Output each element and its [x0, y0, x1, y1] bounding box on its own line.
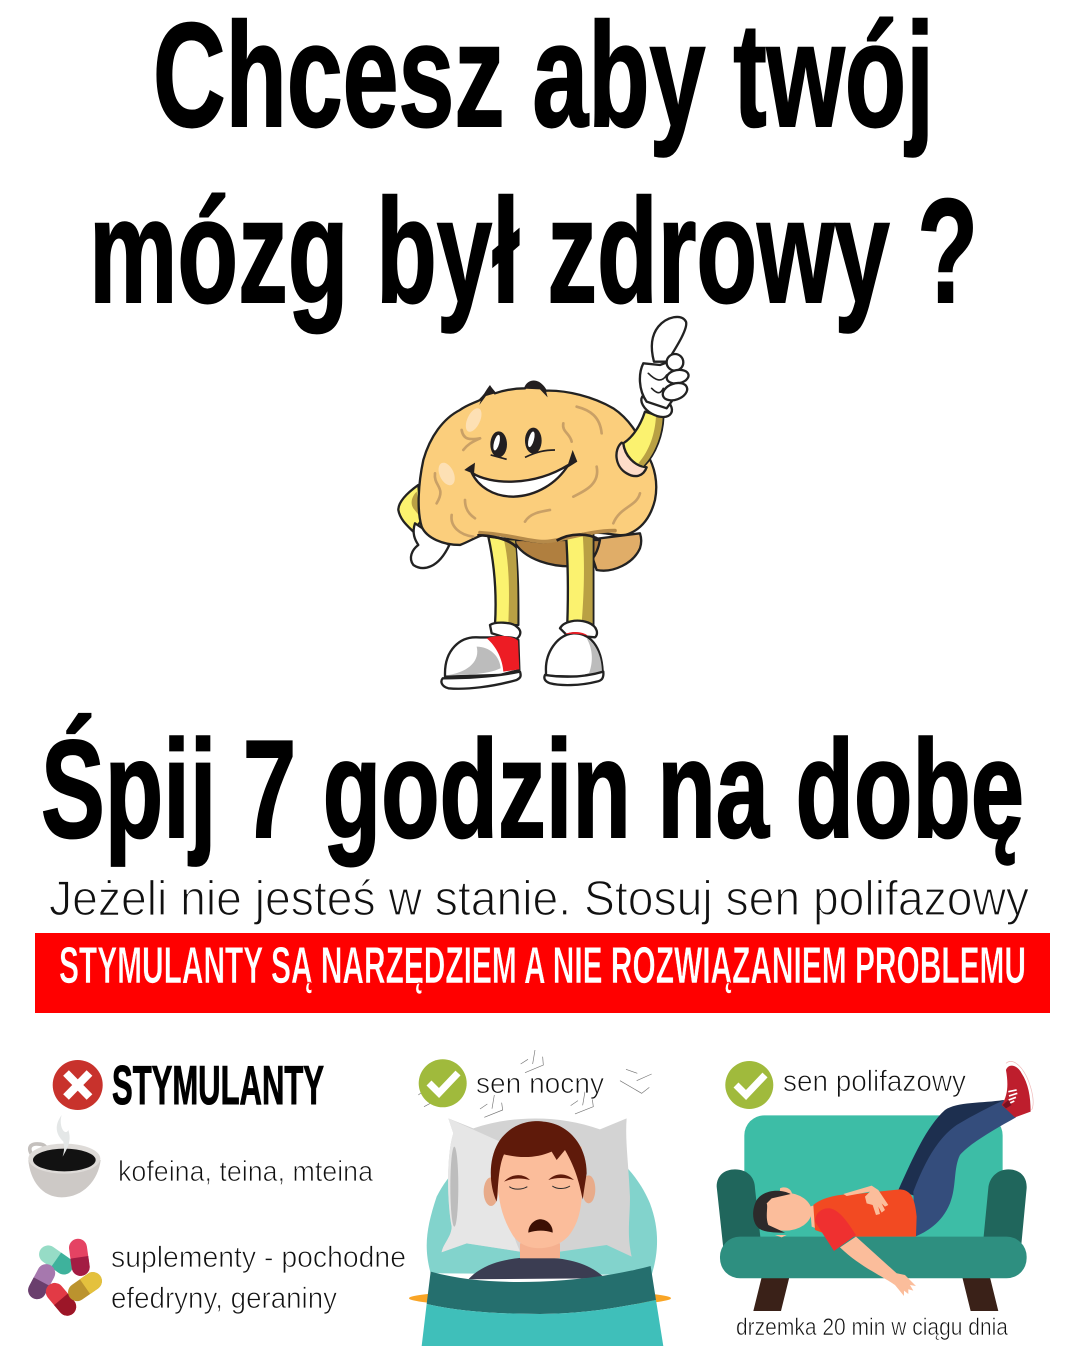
smile [464, 450, 577, 497]
illustration: sleeping man in bed [409, 1118, 671, 1346]
brain back right lobe [587, 533, 641, 571]
panel: night sleep [409, 1050, 671, 1346]
hair tufts [479, 380, 548, 405]
pointing hand [637, 317, 690, 422]
caption: 20 minute nap: drzemka 20 min w ciągu dnia [736, 1314, 1009, 1341]
eyes [490, 428, 555, 459]
legs [488, 532, 593, 625]
icon: green check [725, 1061, 773, 1109]
banner: stimulants warning [35, 933, 1050, 1013]
right shoe [544, 621, 603, 685]
brain front [419, 383, 656, 545]
illustration: man napping on sofa [717, 1061, 1033, 1311]
highlights [435, 406, 485, 488]
panel: polyphasic sleep [717, 1061, 1033, 1341]
text: caffeine: kofeina, teina, mteina [118, 1156, 374, 1188]
text: supplements: suplementy - pochodne [111, 1241, 406, 1274]
label: polyphasic sleep: sen polifazowy [783, 1065, 966, 1098]
snore marks [418, 1050, 652, 1117]
leg top shadows [477, 535, 600, 547]
icon: pills [25, 1238, 105, 1319]
icon: brain mascot pointing up [398, 317, 690, 689]
brain folds [435, 407, 640, 542]
icon: coffee cup [28, 1115, 101, 1197]
label: night sleep: sen nocny [476, 1068, 604, 1100]
icon: green check [419, 1059, 467, 1107]
subheading: Jeżeli nie jesteś w stanie. Stosuj sen polifazowy [49, 872, 1029, 926]
panel: stimulants [25, 1054, 406, 1319]
text: ephedrine: efedryny, geraniny [111, 1282, 337, 1315]
raised arm [616, 412, 663, 476]
icon: red cross [53, 1060, 103, 1110]
brain back lobe [513, 540, 600, 566]
heading: stimulants: STYMULANTY [112, 1054, 324, 1116]
left arm and hand [398, 485, 449, 568]
left shoe [441, 623, 521, 689]
